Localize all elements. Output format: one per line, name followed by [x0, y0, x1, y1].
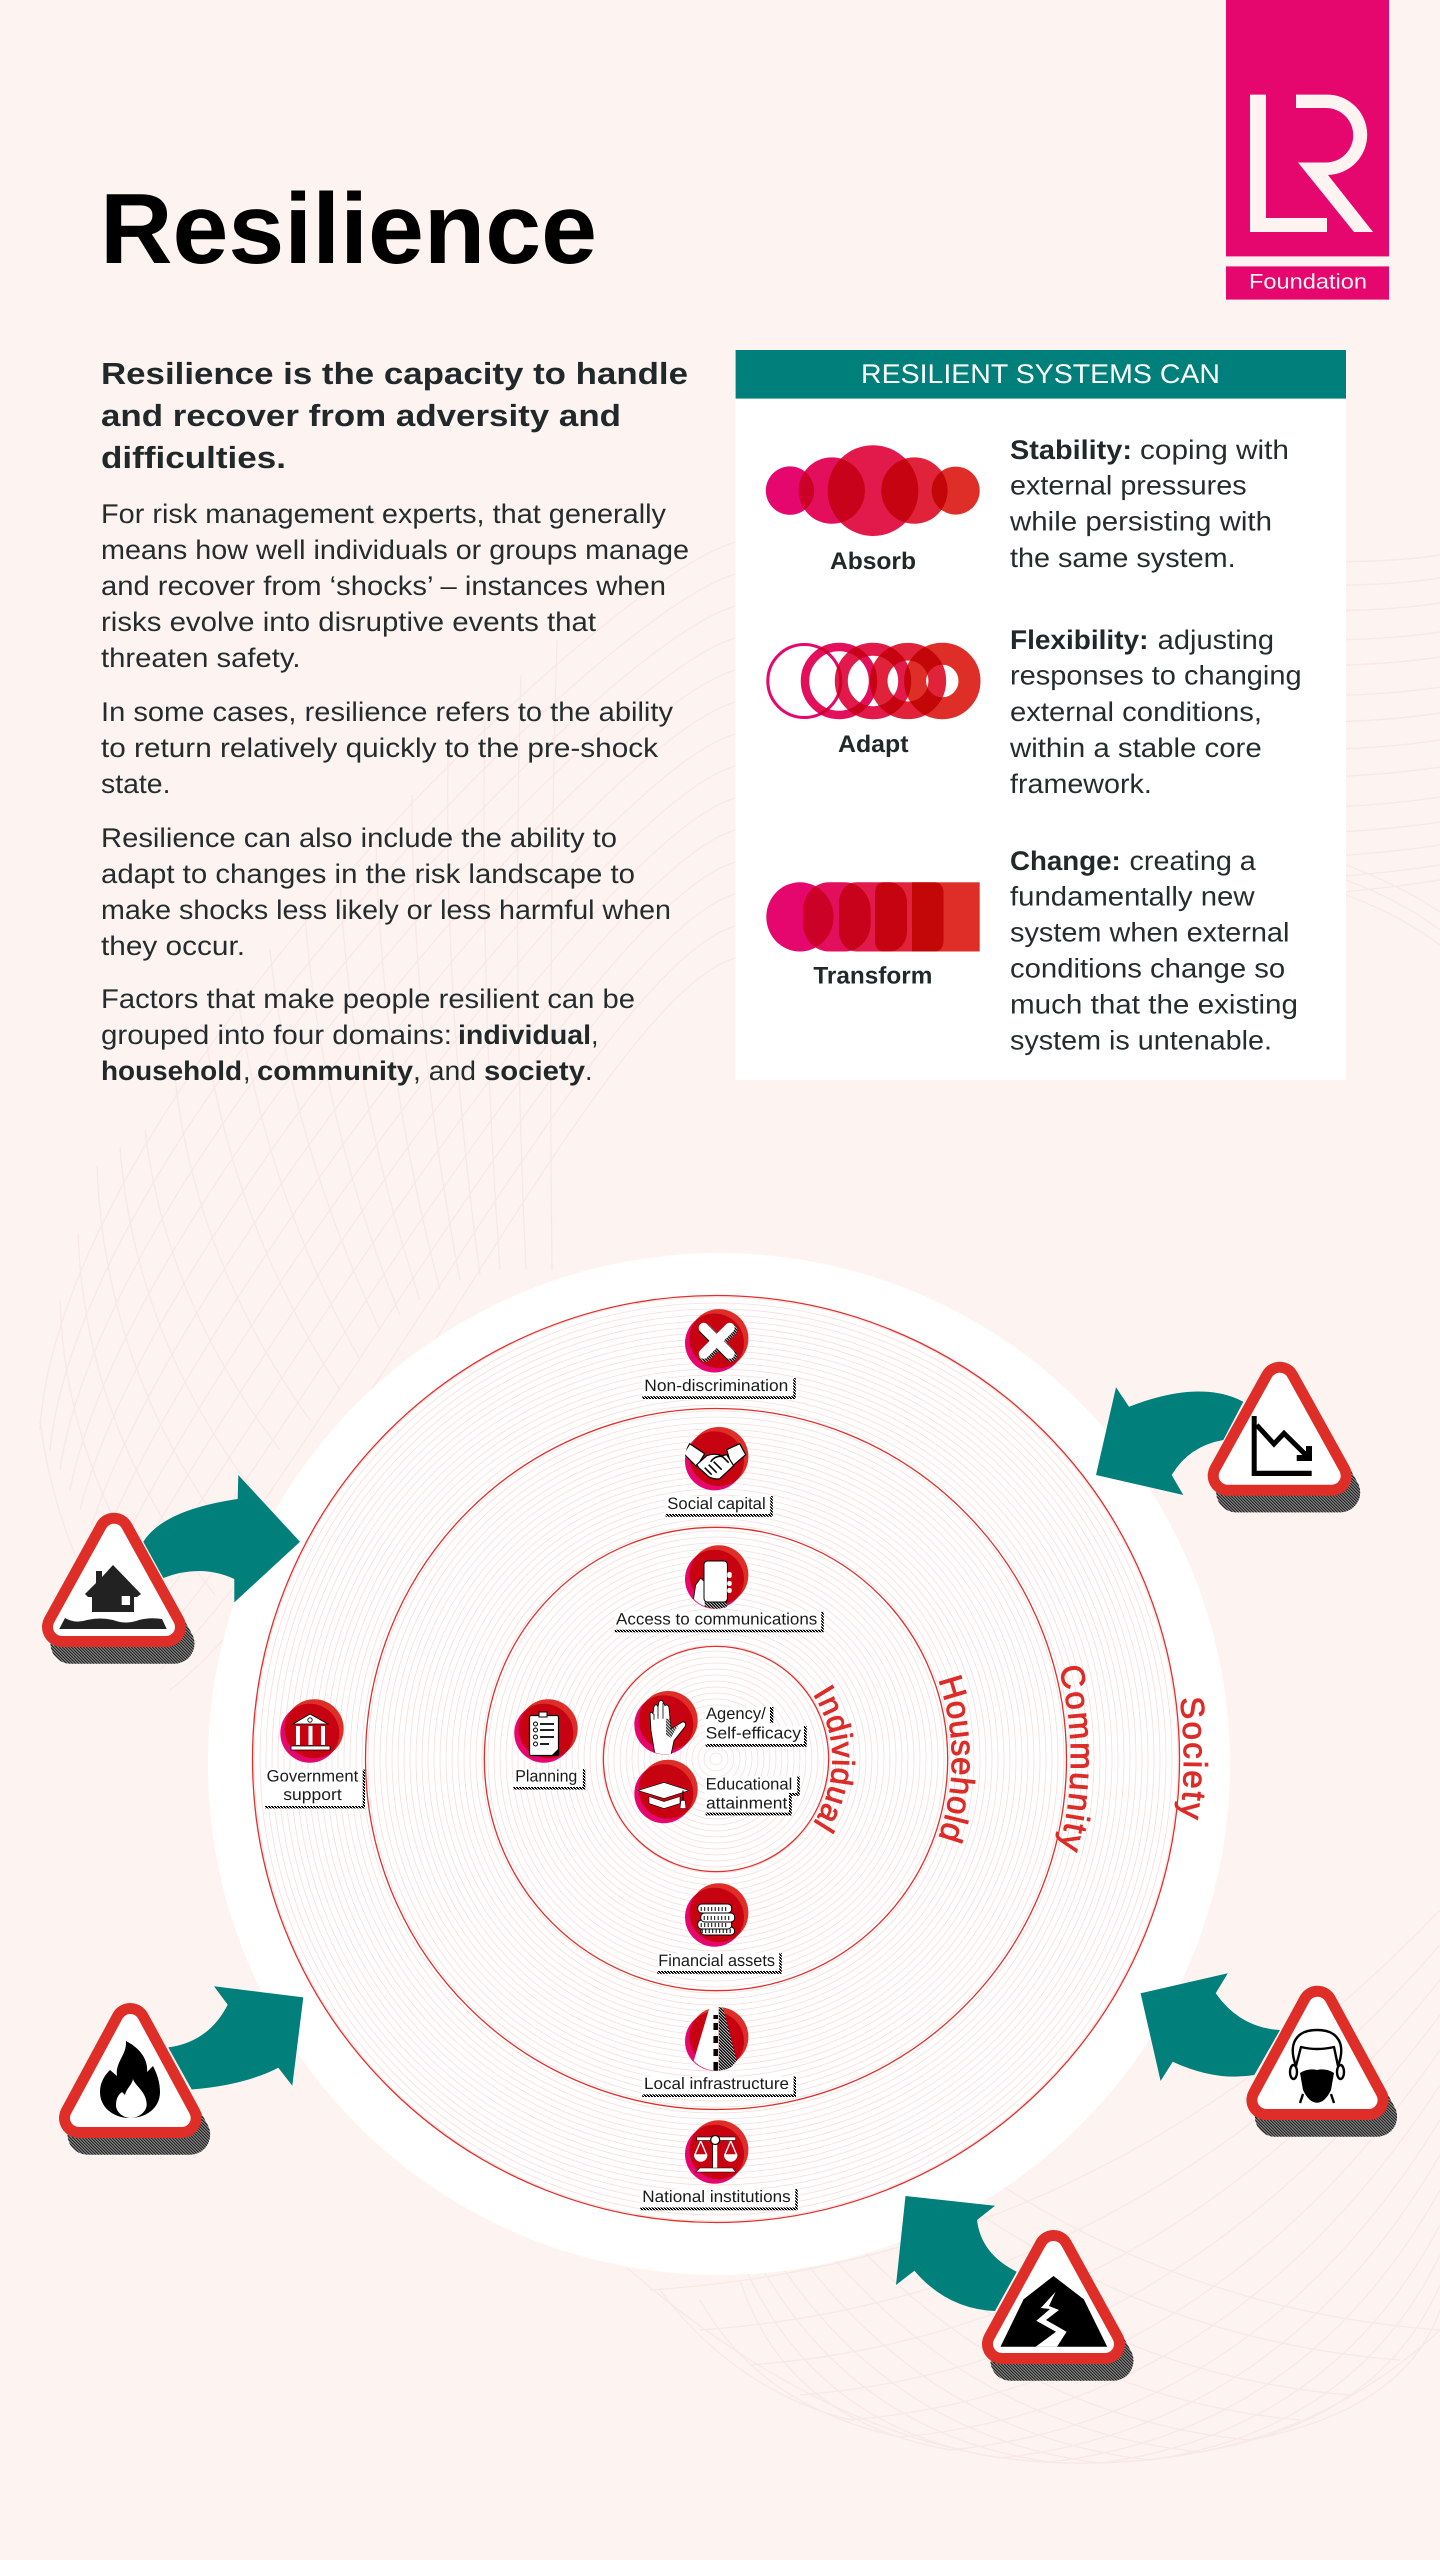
panel header: RESILIENT SYSTEMS CAN	[861, 359, 1220, 389]
panel: resilient systems can	[736, 350, 1346, 1080]
text block: four domains: household	[101, 1056, 242, 1086]
text: change: fundamentally new	[1010, 882, 1255, 912]
text block: adapting to changes: adapt to changes in the risk landscape to	[101, 859, 635, 889]
arrow: pandemic into system	[1141, 1973, 1280, 2081]
diagram: adapt	[768, 644, 970, 718]
intro heading: Resilience is the capacity to handle	[101, 357, 688, 391]
text: flexibility	[1009, 625, 1302, 799]
factor: educational attainment: attainment	[706, 1794, 788, 1812]
ring label: society: Society	[1174, 1698, 1208, 1820]
text: change	[1010, 846, 1298, 1056]
text: stability: Stability:	[1010, 435, 1132, 465]
label: absorb: Absorb	[830, 548, 916, 575]
factor: financial assets: Financial assets	[658, 1952, 775, 1970]
text: flexibility: framework.	[1010, 769, 1152, 799]
text: stability: while persisting with	[1009, 506, 1272, 536]
factor: access to communications: Access to communications	[616, 1610, 817, 1628]
hazard icon: fire	[79, 2023, 190, 2135]
text block: four domains: ,	[243, 1056, 251, 1086]
label: adapt: Adapt	[838, 731, 908, 758]
factor: government support	[265, 1699, 365, 1808]
factor: educational attainment	[634, 1760, 800, 1823]
factor: planning	[513, 1699, 585, 1790]
text block: return to pre-shock state: to return relatively quickly to the pre-shock	[101, 733, 659, 763]
hazard icon: pandemic mask	[1266, 2006, 1377, 2117]
text: stability: the same system.	[1010, 543, 1236, 573]
text block: adapting to changes	[101, 823, 671, 961]
text block: four domains: Factors that make people resilient can be	[101, 984, 635, 1014]
text block: four domains: community	[257, 1056, 413, 1086]
ring label: community: Community	[1056, 1666, 1091, 1854]
text block: definition: means how well individuals or groups manage	[101, 535, 689, 565]
text block: definition: and recover from ‘shocks’ – instances when	[101, 571, 666, 601]
text block: four domains	[101, 984, 635, 1086]
text: flexibility: responses to changing	[1010, 661, 1302, 691]
text block: definition: threaten safety.	[101, 643, 300, 673]
text: stability: external pressures	[1010, 471, 1247, 501]
factor: non-discrimination	[642, 1309, 796, 1399]
intro heading: difficulties.	[101, 441, 286, 475]
text block: definition	[101, 499, 689, 673]
ring label: individual: Individual	[814, 1684, 856, 1834]
text block: return to pre-shock state: In some cases, resilience refers to the ability	[101, 697, 674, 727]
text block: adapting to changes: make shocks less likely or less harmful when	[101, 895, 671, 925]
intro heading	[101, 357, 688, 475]
factor: access to communications	[615, 1545, 824, 1632]
diagram: concentric resilience domains	[208, 1253, 1230, 2275]
hazard icon: economic decline	[1228, 1382, 1340, 1492]
arrow: earthquake into system	[896, 2196, 1017, 2311]
text block: four domains: .	[585, 1056, 593, 1086]
ring label: household: Household	[938, 1674, 976, 1844]
text block: return to pre-shock state	[101, 697, 674, 799]
factor: government support: support	[283, 1786, 342, 1804]
factor: national institutions: National institutions	[642, 2188, 791, 2206]
text: stability	[1009, 435, 1289, 573]
intro heading: and recover from adversity and	[101, 399, 621, 433]
factor: non-discrimination: Non-discrimination	[644, 1377, 788, 1395]
arrow: fire into system	[168, 1986, 303, 2090]
text block: definition: For risk management experts, that generally	[101, 499, 667, 529]
text block: four domains: , and	[413, 1056, 476, 1086]
factor: national institutions	[640, 2120, 798, 2210]
factor: educational attainment: Educational	[706, 1776, 792, 1794]
arrow: flood into system	[143, 1475, 300, 1602]
factor: social capital: Social capital	[667, 1495, 766, 1513]
text: change: system is untenable.	[1010, 1026, 1272, 1056]
text block: adapting to changes: Resilience can also include the ability to	[101, 823, 617, 853]
text block: definition: risks evolve into disruptive events that	[101, 607, 597, 637]
panel header	[736, 350, 1346, 399]
text: flexibility: adjusting	[1158, 625, 1274, 655]
factor: agency / self-efficacy	[634, 1691, 807, 1755]
logo: LR Foundation: Foundation	[1249, 271, 1367, 294]
factor: government support: Government	[267, 1768, 359, 1786]
text: change: much that the existing	[1010, 990, 1298, 1020]
factor: planning: Planning	[515, 1767, 577, 1785]
text block: four domains: society	[484, 1056, 585, 1086]
text block: return to pre-shock state: state.	[101, 769, 170, 799]
arrow: economic decline into system	[1096, 1387, 1243, 1495]
hazard icon: earthquake	[1000, 2250, 1114, 2361]
text: flexibility: Flexibility:	[1010, 625, 1148, 655]
diagram: transform	[766, 882, 980, 952]
text block: four domains: individual	[458, 1020, 591, 1050]
text: change: Change:	[1010, 846, 1121, 876]
text block: four domains: ,	[591, 1020, 599, 1050]
title: Resilience	[100, 173, 597, 285]
text block: adapting to changes: they occur.	[101, 931, 245, 961]
text: flexibility: within a stable core	[1009, 733, 1262, 763]
text block: four domains: grouped into four domains:	[101, 1020, 452, 1050]
diagram: absorb	[766, 445, 980, 536]
text: stability: coping with	[1140, 435, 1289, 465]
hazard icon: flood	[59, 1533, 174, 1644]
factor: agency / self-efficacy: Self-efficacy	[706, 1724, 802, 1742]
factor: local infrastructure	[642, 2007, 796, 2097]
factor: local infrastructure: Local infrastructure	[644, 2075, 789, 2093]
text: change: system when external	[1010, 918, 1289, 948]
factor: financial assets	[657, 1883, 782, 1974]
logo: LR Foundation	[1226, 0, 1389, 300]
factor: social capital	[666, 1427, 773, 1517]
text: flexibility: external conditions,	[1010, 697, 1262, 727]
text: change: creating a	[1130, 846, 1257, 876]
label: transform: Transform	[813, 962, 932, 990]
text: change: conditions change so	[1010, 954, 1285, 984]
factor: agency / self-efficacy: Agency/	[706, 1705, 766, 1723]
